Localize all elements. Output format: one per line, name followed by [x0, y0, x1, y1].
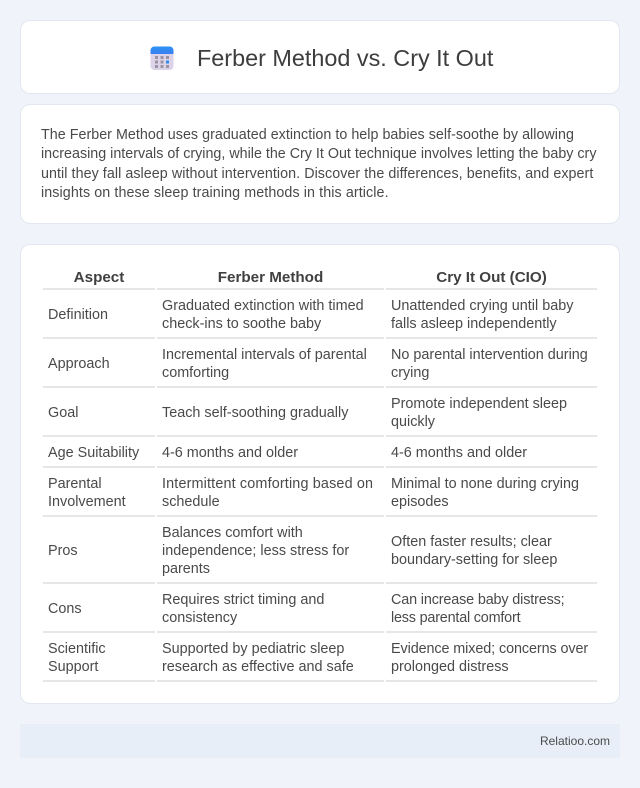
row: Approach: comforting [162, 365, 229, 381]
row: Cons: less parental comfort [391, 610, 520, 626]
panel: comparison table [20, 244, 620, 704]
row: Scientific Support: Evidence mixed; concerns over [391, 641, 588, 657]
row: Scientific Support: Scientific [48, 641, 106, 657]
panel: intro [20, 104, 620, 224]
row: Cons: consistency [162, 610, 237, 626]
row: Pros: Often faster results; clear [391, 534, 552, 550]
row: Pros: independence; less stress for [162, 543, 349, 559]
row: Parental Involvement: Involvement [48, 494, 126, 510]
table header: Cry It Out: Cry It Out (CIO) [436, 269, 547, 286]
header panel [20, 20, 620, 94]
icon: calendar [150, 46, 174, 70]
row: Definition: Definition [48, 307, 108, 323]
intro paragraph [41, 127, 596, 201]
row: Scientific Support: Supported by pediatric sleep [162, 641, 344, 657]
row: Scientific Support: Support [48, 659, 98, 675]
row: Approach: Incremental intervals of parental [162, 347, 367, 363]
row: Scientific Support [48, 641, 588, 675]
row: Pros: parents [162, 561, 210, 577]
row: Age Suitability [48, 445, 527, 461]
row: Goal: Goal [48, 405, 78, 421]
title: Ferber Method vs. Cry It Out [197, 45, 493, 71]
intro paragraph: until they fall asleep without intervention. Discover the differences, benefits, and expert [41, 166, 593, 182]
row: Definition: Graduated extinction with timed [162, 298, 364, 314]
row: Cons: Requires strict timing and [162, 592, 324, 608]
row: Goal [48, 396, 567, 430]
row: Parental Involvement: schedule [162, 494, 220, 510]
intro paragraph: insights on these sleep training methods in this article. [41, 185, 389, 201]
intro paragraph: increasing intervals of crying, while the Cry It Out technique involves letting the baby cry [41, 146, 596, 162]
row: Definition: Unattended crying until baby [391, 298, 573, 314]
row: Scientific Support: research as effective and safe [162, 659, 354, 675]
table header: Ferber Method: Ferber Method [218, 269, 323, 286]
row: Definition [48, 298, 574, 332]
intro paragraph: The Ferber Method uses graduated extinction to help babies self-soothe by allowing [41, 127, 574, 143]
row: Goal: Teach self-soothing gradually [162, 405, 348, 421]
row: Parental Involvement: episodes [391, 494, 449, 510]
row: Definition: check-ins to soothe baby [162, 316, 321, 332]
row: Approach [48, 347, 588, 381]
row: Pros: boundary-setting for sleep [391, 552, 557, 568]
row: Parental Involvement: Intermittent comforting based on [162, 476, 373, 492]
row: Approach: crying [391, 365, 429, 381]
row: Cons: Cons [48, 601, 82, 617]
row: Approach: Approach [48, 356, 110, 372]
row: Definition: falls asleep independently [391, 316, 557, 332]
footer credit: Relatioo.com [540, 734, 610, 748]
row: Scientific Support: prolonged distress [391, 659, 509, 675]
row: Goal: quickly [391, 414, 435, 430]
row: Age Suitability: 4-6 months and older [391, 445, 527, 461]
footer bar [20, 724, 620, 758]
row: Cons: Can increase baby distress; [391, 592, 565, 608]
row: Pros [48, 525, 557, 577]
row: Pros: Pros [48, 543, 78, 559]
row: Cons [48, 592, 565, 626]
row: Parental Involvement [48, 476, 579, 510]
row: Goal: Promote independent sleep [391, 396, 567, 412]
row: Age Suitability: 4-6 months and older [162, 445, 298, 461]
row: Approach: No parental intervention during [391, 347, 588, 363]
row: Age Suitability: Age Suitability [48, 445, 139, 461]
row: Parental Involvement: Minimal to none during crying [391, 476, 579, 492]
row: Parental Involvement: Parental [48, 476, 102, 492]
row: Pros: Balances comfort with [162, 525, 303, 541]
table header: Aspect: Aspect [74, 269, 124, 286]
